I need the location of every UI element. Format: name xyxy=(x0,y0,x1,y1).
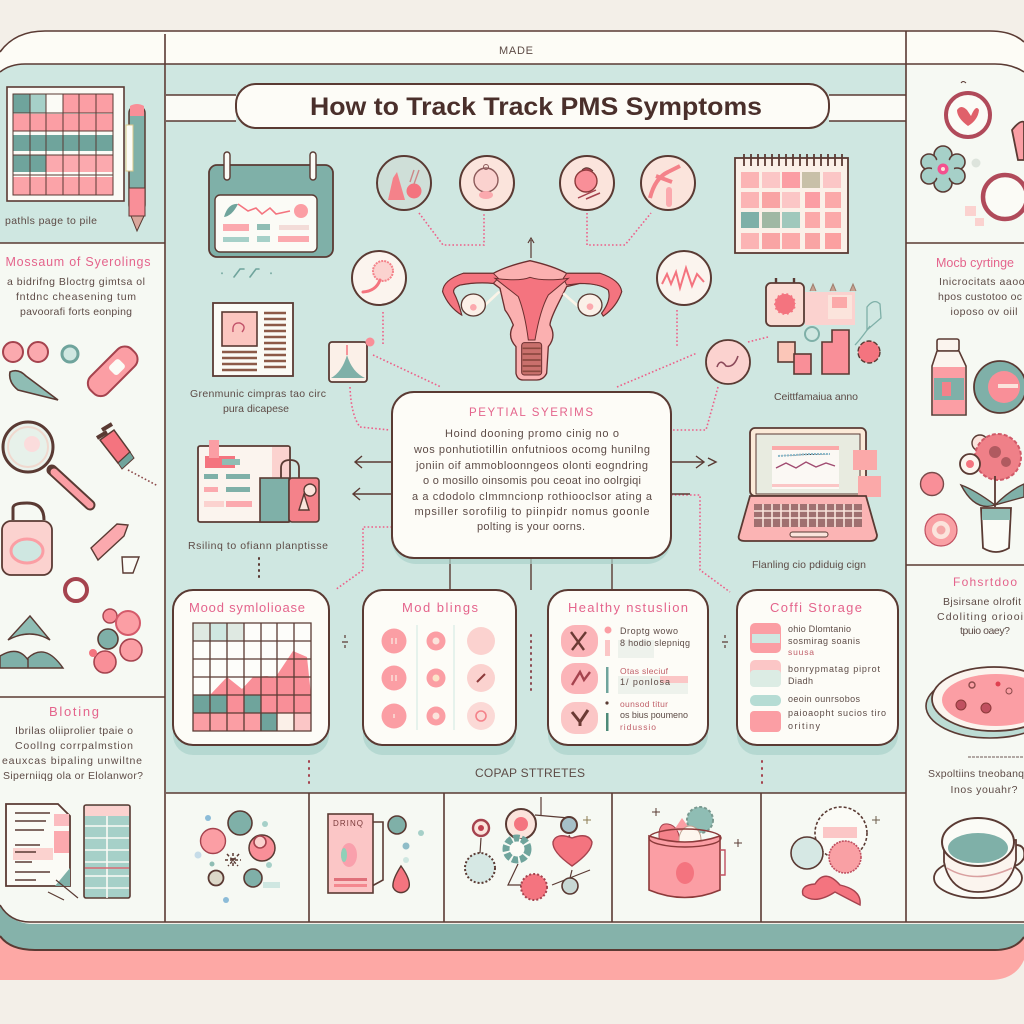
bottom icon: bubble cluster xyxy=(194,811,280,903)
icon: teal badge xyxy=(974,361,1024,413)
icon: glasses xyxy=(3,342,48,362)
right closing text: Inos youahr? xyxy=(950,784,1018,796)
bottom icon: mug and drop xyxy=(328,814,424,893)
bottom icon: mug and drop: DRINQ xyxy=(333,819,363,828)
icon: soup bowl xyxy=(926,667,1024,738)
panel: left heading and text xyxy=(6,255,150,318)
right closing text xyxy=(928,768,1024,796)
icon: bottle xyxy=(932,339,966,415)
panel: healthy nutrition card: os bius poumeno xyxy=(620,710,688,720)
panel: mood chart card xyxy=(173,590,329,755)
icon: clip fragment xyxy=(1012,122,1024,160)
panel: healthy nutrition card: Healthy nstuslion xyxy=(568,600,688,615)
panel: mood rating card xyxy=(363,590,516,755)
circle icon: baby xyxy=(460,156,514,210)
panel: central text box: wos ponhutiotillin onfutnioos ocomg hunilng xyxy=(413,444,650,456)
bottom icon: pink cup with contents xyxy=(649,807,742,898)
panel: central text box: joniin oif ammobloonngeos olonti eogndring xyxy=(415,460,648,472)
chart: area over grid xyxy=(193,623,311,731)
icon: marker and cap xyxy=(91,524,139,573)
icon: pills xyxy=(89,609,142,673)
icon: symptom grid and pen xyxy=(7,87,145,231)
right closing text: Sxpoltiins tneobanq xyxy=(928,768,1024,780)
icon: capsule xyxy=(84,342,142,400)
icon: small ring xyxy=(62,346,78,362)
top label: MADE xyxy=(499,45,533,57)
icon: open book xyxy=(213,303,293,376)
caption: planning: Ceittfamaiua anno xyxy=(774,391,858,403)
icon: ring xyxy=(65,579,87,601)
icon: green shapes xyxy=(0,616,63,668)
panel: bloating text: Siperniiqg ola or Elolanwor? xyxy=(3,770,143,782)
panel: central text box: PEYTIAL SYERIMS xyxy=(469,407,593,419)
icon: form with padlock xyxy=(198,440,319,522)
decorative dots under calendar xyxy=(222,269,271,277)
panel: coffee storage card: oritiny xyxy=(788,721,820,731)
caption: laptop: Flanling cio pdiduig cign xyxy=(752,559,866,571)
icon: small window xyxy=(329,338,374,382)
icon: laptop with chart xyxy=(739,428,881,541)
connector lines to central box xyxy=(353,456,716,590)
panel: left heading and text: fntdnc cheasening tum xyxy=(16,291,136,303)
footer band: pink and teal base xyxy=(0,905,1024,980)
panel: right mood text: hpos custotoo oc xyxy=(938,291,1022,303)
panel: coffee storage card: sosmirag soanis xyxy=(788,636,860,646)
panel: healthy nutrition card xyxy=(548,590,708,755)
title banner xyxy=(236,84,829,128)
icon: wall calendar with chart xyxy=(209,152,333,257)
caption: grid: pathls page to pile xyxy=(5,215,97,227)
icon: target xyxy=(925,514,957,546)
panel: central text box: Hoind dooning promo cinig no o xyxy=(445,428,619,440)
circle icon: organ xyxy=(560,156,614,210)
icon: plug xyxy=(97,424,158,486)
icon: ring xyxy=(983,175,1024,219)
arrow up to uterus xyxy=(528,238,534,258)
panel: right lower text: Fohsrtdoo xyxy=(953,575,1017,589)
section label: COPAP STTRETES xyxy=(475,766,585,780)
dotted connectors xyxy=(335,213,768,592)
panel: mood chart card: Mood symlolioase xyxy=(189,600,305,615)
panel: healthy nutrition card: 1/ ponlosa xyxy=(620,677,670,687)
panel: central text box xyxy=(392,392,671,564)
panel: central text box: o o mosillo oinsomis pou ceoat ino oolrgiqi xyxy=(423,475,641,487)
panel: right lower text xyxy=(937,575,1024,637)
icon: document and table xyxy=(6,804,130,900)
panel: central text box: polting is your oorns. xyxy=(477,521,585,533)
panel: bloating text: eauxcas bipaling unwiltne xyxy=(2,755,142,767)
icon: tea cup xyxy=(934,818,1024,898)
panel: coffee storage card: paioaopht sucios tiro xyxy=(788,708,886,718)
icon: padlock xyxy=(2,503,52,575)
panel: right mood text xyxy=(936,256,1024,318)
panel: coffee storage card: suusa xyxy=(788,647,814,657)
panel: bloating text xyxy=(2,704,143,782)
panel: bloating text: Bloting xyxy=(49,704,99,719)
panel: left heading and text: pavoorafi forts eonping xyxy=(20,306,132,318)
panel: central text box: mpsiller sorofilig to piinpidr nomus goonle xyxy=(414,506,650,518)
icon: flower xyxy=(921,146,980,192)
icon: thermometer pen xyxy=(10,371,58,400)
panel: coffee storage card: bonrypmatag piprot xyxy=(788,664,880,674)
circle icon: wave xyxy=(657,251,711,305)
panel: central text box: a a cdodolo clmmncionp rothiooclsor ating a xyxy=(412,491,653,503)
icon: spiral calendar xyxy=(735,154,848,253)
icon: flower pot xyxy=(960,434,1024,552)
panel: coffee storage card: ohio Dlomtanio xyxy=(788,624,851,634)
panel: coffee storage card: Coffi Storage xyxy=(770,600,862,615)
panel: right lower text: tpuio oaey? xyxy=(960,625,1010,637)
title banner: How to Track Track PMS Symptoms xyxy=(310,93,762,121)
icon: heart badge xyxy=(946,82,990,137)
caption: book: pura dicapese xyxy=(223,403,289,415)
icon: planning cluster xyxy=(766,278,881,374)
small separators between cards xyxy=(342,635,728,648)
caption: book xyxy=(190,388,326,415)
central icon: uterus xyxy=(443,261,622,380)
circle icon: ribbon xyxy=(641,156,695,210)
circle icon: lungs xyxy=(377,156,431,210)
divider text dots xyxy=(968,756,1024,758)
circle icon: squiggle xyxy=(706,340,750,384)
panel: coffee storage card xyxy=(737,590,898,755)
panel: healthy nutrition card: 8 hodio slepniqg xyxy=(620,638,690,648)
icon: small coin xyxy=(920,472,944,496)
caption: form: Rsilinq to ofiann planptisse xyxy=(188,540,328,552)
panel: coffee storage card: Diadh xyxy=(788,676,813,686)
caption: book: Grenmunic cimpras tao circ xyxy=(190,388,326,400)
panel: bloating text: Coollng corrpalmstion xyxy=(15,740,133,752)
circle icon: ovary bloom xyxy=(352,251,406,305)
panel: healthy nutrition card: Otas sleciuf xyxy=(620,666,669,676)
panel: bloating text: Ibrilas oliiprolier tpaie o xyxy=(15,725,133,737)
panel: right mood text: Mocb cyrtinge xyxy=(936,256,1014,270)
pink blotches xyxy=(965,206,984,226)
panel: healthy nutrition card: ounsod titur xyxy=(620,699,668,709)
panel: healthy nutrition card: ridussio xyxy=(620,722,656,732)
panel: healthy nutrition card: Droptg wowo xyxy=(620,626,678,636)
bottom icon: linked nodes and heart xyxy=(465,797,592,900)
dotted dividers xyxy=(259,558,762,787)
panel: left heading and text: a bidrifng Bloctrg gimtsa ol xyxy=(7,276,145,288)
panel: coffee storage card: oeoin ounrsobos xyxy=(788,694,860,704)
panel: right lower text: Bjsirsane olrofit xyxy=(943,596,1021,608)
icon: magnifier xyxy=(3,422,90,505)
panel: right mood text: ioposo ov oiil xyxy=(950,306,1018,318)
panel: mood rating card: Mod blings xyxy=(402,600,478,615)
bottom icon: linked circles xyxy=(791,807,880,905)
panel: left heading and text: Mossaum of Syerolings xyxy=(6,255,150,269)
